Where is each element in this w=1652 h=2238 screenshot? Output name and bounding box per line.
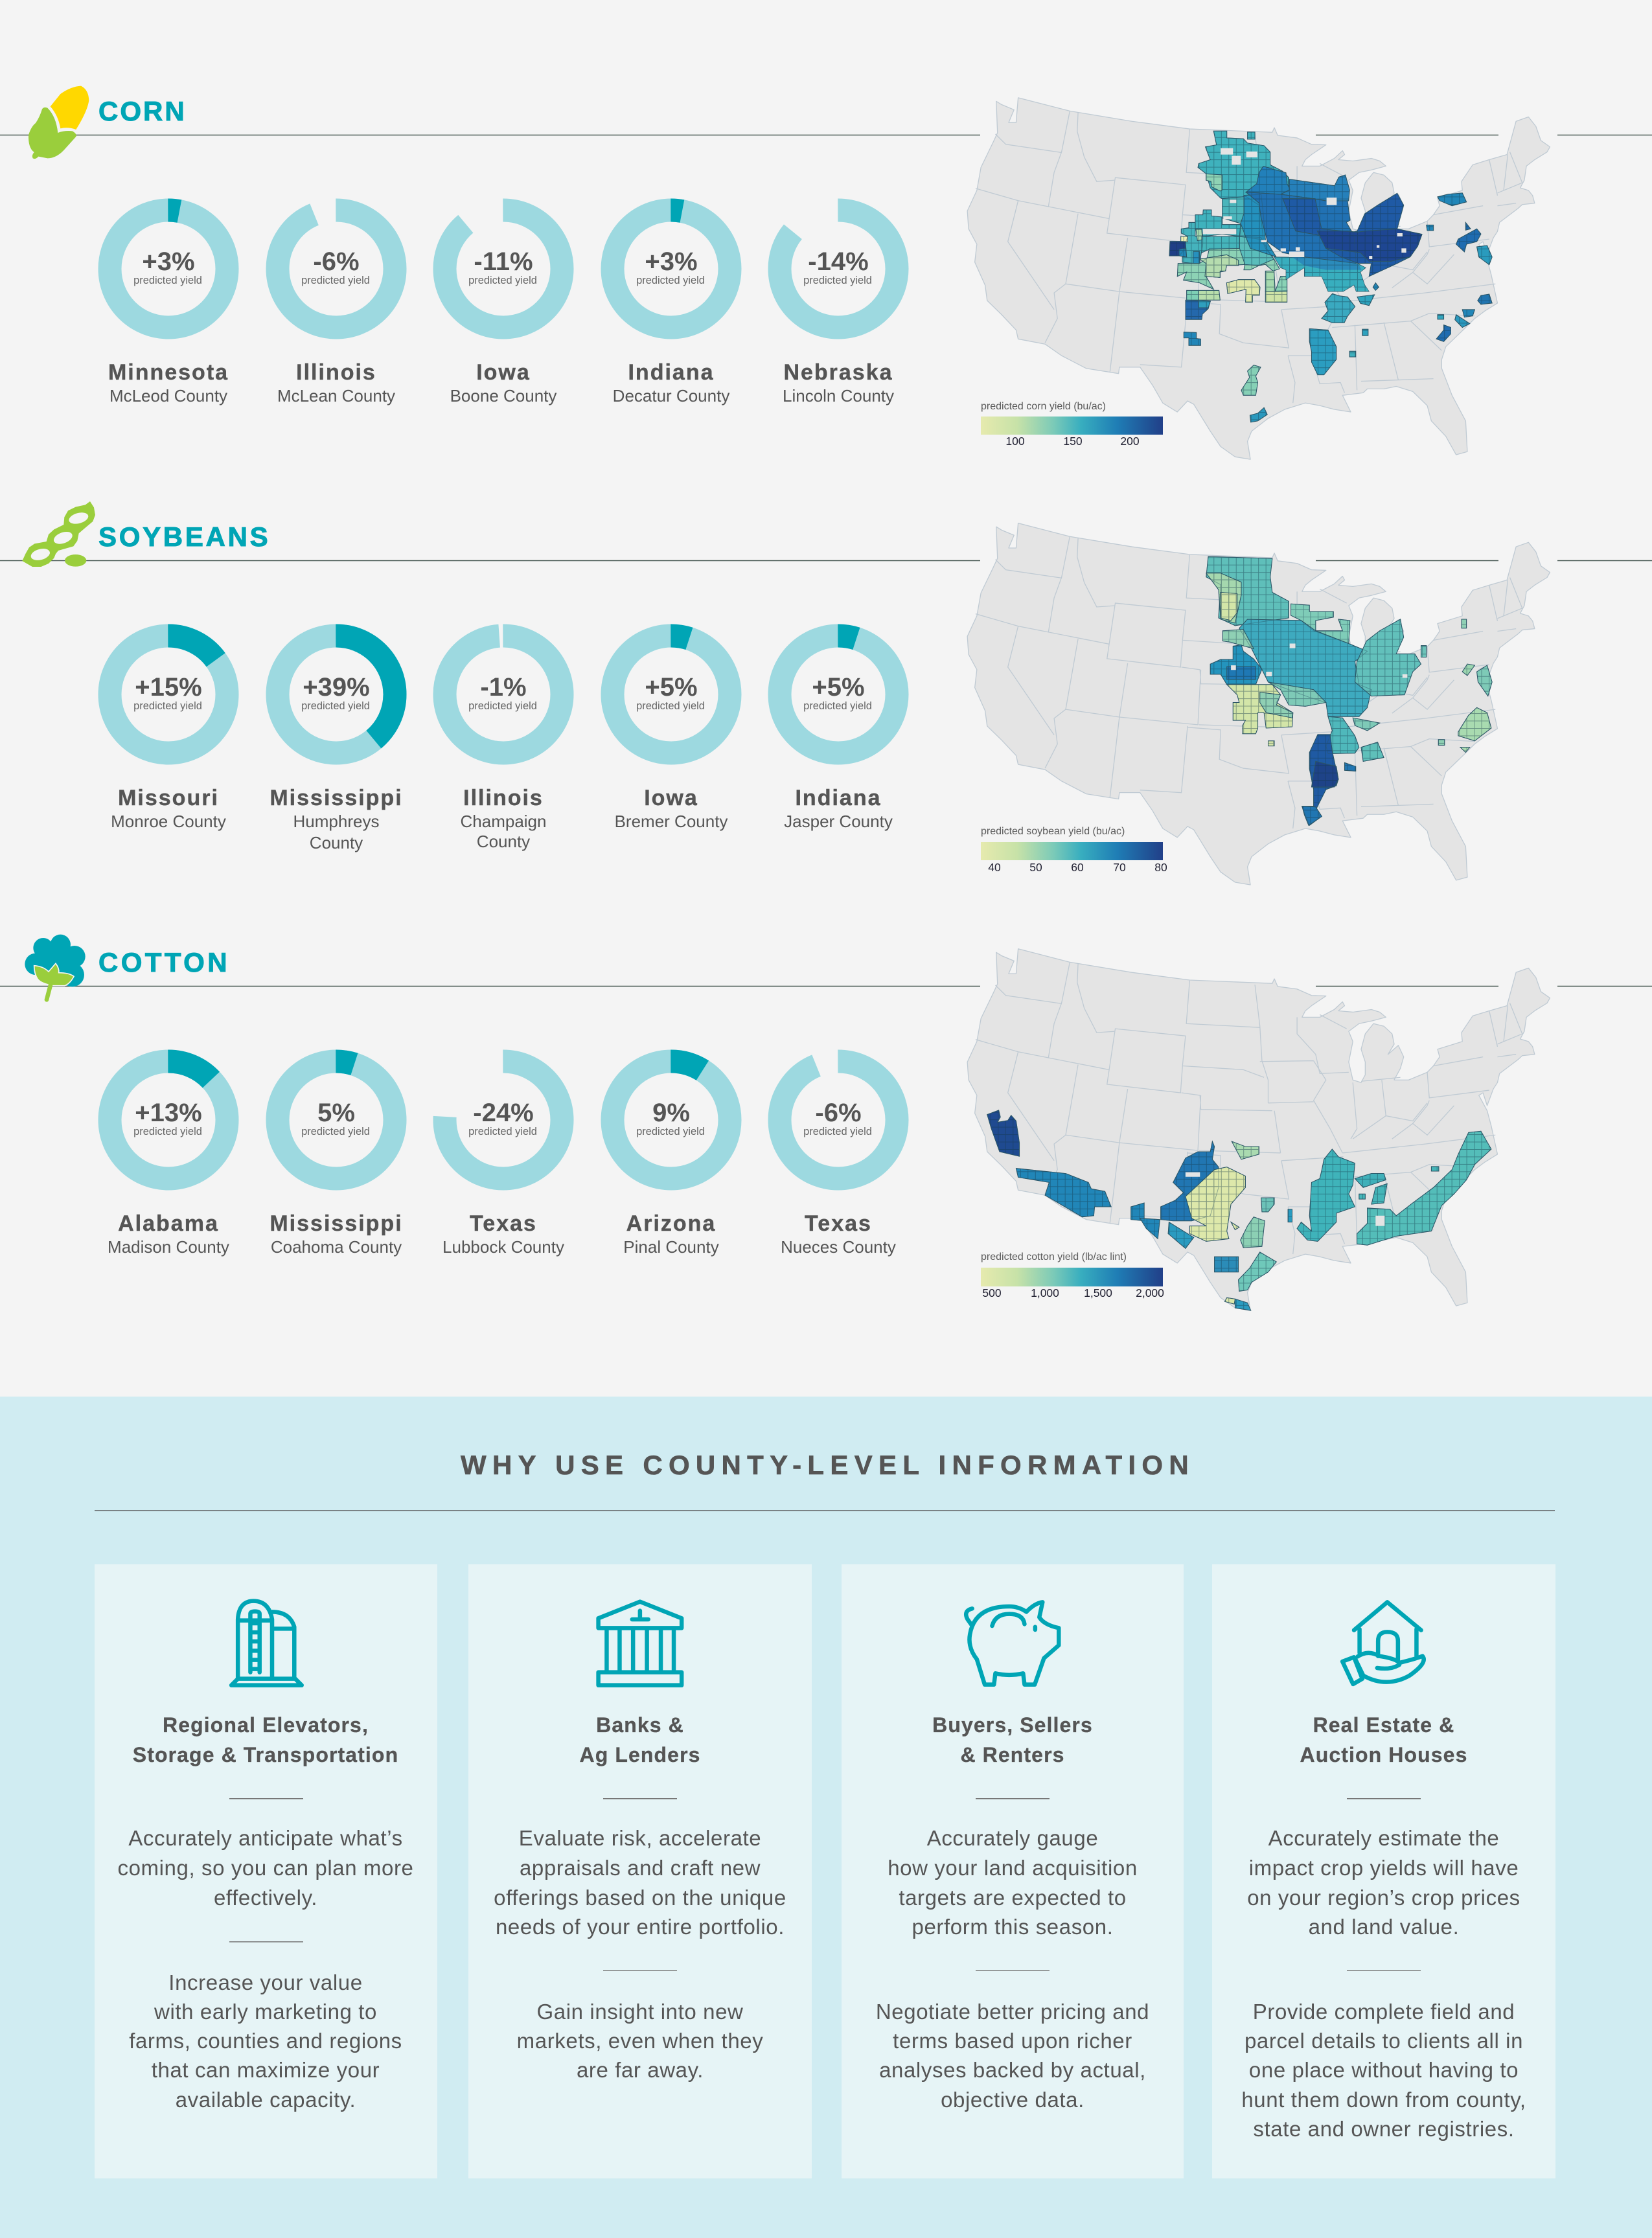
card: buyers, sellers and renters: targets are expected to — [899, 1886, 1127, 1910]
donut: Indiana +5%: predicted yield — [803, 700, 872, 712]
county fills: corn belt — [1169, 166, 1422, 345]
donut: Iowa +5%: predicted yield — [636, 700, 705, 712]
county boundary grid: corn, outlying areas — [1198, 131, 1492, 422]
donut: Mississippi 5%: Mississippi — [270, 1211, 403, 1236]
donut: Mississippi 5%: predicted yield — [301, 1126, 370, 1137]
card: real estate and auction houses — [1212, 1564, 1555, 2178]
upper row of the southern band — [1291, 257, 1362, 270]
card: regional elevators: with early marketing to — [154, 2000, 377, 2024]
donut: Alabama +13% — [108, 1061, 229, 1257]
donut: Missouri +15%: Monroe County — [111, 812, 226, 831]
county fills: cotton — [987, 1110, 1491, 1310]
donut: Minnesota +3%: McLeod County — [109, 386, 227, 405]
heading: soybeans: SOYBEANS — [98, 521, 270, 552]
card: regional elevators — [95, 1564, 437, 2178]
donut: Illinois -6%: predicted yield — [301, 275, 370, 286]
donut: Arizona 9%: predicted yield — [636, 1126, 705, 1137]
icon: cotton — [25, 935, 86, 999]
card: real estate and auction houses: Accurately estimate the — [1268, 1826, 1499, 1850]
card: regional elevators: Accurately anticipate what’s — [128, 1826, 403, 1850]
legend: cotton yield — [981, 1251, 1164, 1299]
corn belt body — [1169, 166, 1422, 345]
card: real estate and auction houses: impact crop yields will have — [1249, 1856, 1519, 1880]
card: buyers, sellers and renters: perform this season. — [912, 1915, 1113, 1939]
donut: Texas -24% — [442, 1061, 564, 1257]
donut: Texas -24%: predicted yield — [468, 1126, 537, 1137]
card: regional elevators: available capacity. — [176, 2088, 356, 2112]
card: banks and ag lenders: are far away. — [577, 2058, 704, 2082]
rule: corn section — [0, 135, 1652, 136]
donut: Indiana +3%: predicted yield — [636, 275, 705, 286]
donut: Missouri +15%: Missouri — [118, 786, 219, 810]
legend: soybean yield: predicted soybean yield (bu/ac) — [981, 826, 1125, 837]
card: buyers, sellers and renters: terms based upon richer — [893, 2029, 1132, 2053]
donut: Mississippi +39%: +39% — [303, 673, 370, 702]
donut: Iowa +5%: +5% — [645, 673, 698, 702]
card: real estate and auction houses: Provide complete field and — [1253, 2000, 1515, 2024]
donut: Texas -24%: Lubbock County — [442, 1237, 564, 1257]
donut: Indiana +3%: Indiana — [628, 360, 715, 385]
donut: Texas -6%: Nueces County — [781, 1237, 896, 1257]
card: buyers, sellers and renters: objective data. — [941, 2088, 1084, 2112]
icon: corn — [29, 86, 89, 159]
donut: Iowa +5% — [613, 636, 729, 831]
icon: soybeans — [22, 501, 95, 567]
donut: Alabama +13%: Madison County — [108, 1237, 229, 1257]
donut: Nebraska -14%: predicted yield — [803, 275, 872, 286]
map: predicted corn yield — [967, 98, 1550, 459]
donut: Arizona 9%: 9% — [652, 1099, 690, 1127]
legend: soybean yield — [981, 826, 1167, 874]
donut: Mississippi +39%: predicted yield — [301, 700, 370, 712]
legend: corn yield: 150 — [1063, 435, 1083, 448]
card: regional elevators: Increase your value — [168, 1970, 363, 1994]
legend: corn yield: 100 — [1005, 435, 1025, 448]
card: buyers, sellers and renters: & Renters — [960, 1743, 1065, 1766]
donut: Indiana +5%: +5% — [812, 673, 865, 702]
donut: Iowa -11%: predicted yield — [468, 275, 537, 286]
donut: Indiana +5%: Jasper County — [784, 812, 893, 831]
gaps without cotton data — [1186, 1172, 1384, 1226]
map: predicted soybean yield — [967, 523, 1550, 885]
icon: bank — [599, 1602, 682, 1685]
southern Missouri and Illinois band, medium blue row — [1274, 257, 1369, 291]
icon: house in hand — [1342, 1602, 1424, 1684]
donut: Minnesota +3% — [108, 210, 229, 405]
card: banks and ag lenders: offerings based on the unique — [494, 1886, 786, 1910]
icon: grain silo — [231, 1601, 302, 1685]
donut: Arizona 9%: Pinal County — [623, 1237, 719, 1257]
card: buyers, sellers and renters: Accurately gauge — [927, 1826, 1098, 1850]
map: predicted cotton yield — [967, 949, 1550, 1310]
legend: cotton yield: 1,000 — [1031, 1286, 1059, 1299]
donut: Illinois -1%: Illinois — [463, 786, 544, 810]
icon: piggy bank — [966, 1602, 1059, 1685]
donut: Iowa -11%: Iowa — [476, 360, 531, 385]
donut: Texas -6%: -6% — [815, 1099, 862, 1127]
donut: Minnesota +3%: predicted yield — [133, 275, 202, 286]
gaps without soybean data — [1231, 644, 1407, 678]
card: regional elevators: Regional Elevators, — [163, 1713, 369, 1737]
donut: Texas -6%: Texas — [805, 1211, 872, 1236]
donut: Missouri +15%: +15% — [135, 673, 202, 702]
donut: Illinois -1%: predicted yield — [468, 700, 537, 712]
donut: Alabama +13%: predicted yield — [133, 1126, 202, 1137]
heading: corn: CORN — [98, 96, 187, 126]
card: real estate and auction houses: and land value. — [1309, 1915, 1459, 1939]
donut: Mississippi +39% — [270, 636, 403, 852]
donut: Texas -6%: predicted yield — [803, 1126, 872, 1137]
donut: Alabama +13%: Alabama — [118, 1211, 219, 1236]
donut: Iowa +5%: Iowa — [644, 786, 698, 810]
card: buyers, sellers and renters: Negotiate better pricing and — [876, 2000, 1149, 2024]
card: banks and ag lenders: markets, even when they — [517, 2029, 763, 2053]
donut: Minnesota +3%: Minnesota — [108, 360, 229, 385]
legend: cotton yield: predicted cotton yield (lb/ac lint) — [981, 1251, 1127, 1262]
donut: Alabama +13%: +13% — [135, 1099, 202, 1127]
card: buyers, sellers and renters: Buyers, Sellers — [932, 1713, 1093, 1737]
legend: soybean yield: 50 — [1029, 861, 1042, 874]
donut: Nebraska -14%: Lincoln County — [783, 386, 894, 405]
donut: Iowa -11% — [444, 210, 562, 405]
donut: Nebraska -14%: -14% — [808, 247, 869, 276]
card: banks and ag lenders: Ag Lenders — [579, 1743, 701, 1766]
legend: corn yield — [981, 401, 1163, 448]
legend: soybean yield: 60 — [1071, 861, 1084, 874]
donut: Illinois -6%: Illinois — [296, 360, 376, 385]
county boundary grid: soybean — [1206, 556, 1492, 825]
county boundary grid: cotton — [987, 1110, 1491, 1310]
donut: Mississippi 5% — [270, 1061, 403, 1257]
gaps in northern plains — [1221, 148, 1257, 165]
heading: cotton: COTTON — [98, 947, 230, 977]
donut: Texas -6% — [780, 1061, 897, 1257]
donut: Mississippi 5%: 5% — [317, 1099, 355, 1127]
donut: Iowa -11%: -11% — [474, 247, 533, 276]
donut: Minnesota +3%: +3% — [142, 247, 195, 276]
donut: Arizona 9%: Arizona — [626, 1211, 716, 1236]
donut: Illinois -1%: -1% — [480, 673, 527, 702]
donut: Mississippi 5%: Coahoma County — [271, 1237, 402, 1257]
county fills: corn, outlying areas — [1198, 131, 1492, 422]
card: real estate and auction houses: parcel details to clients all in — [1245, 2029, 1523, 2053]
legend: corn yield: predicted corn yield (bu/ac) — [981, 401, 1106, 412]
donut: Indiana +3%: +3% — [645, 247, 698, 276]
donut: Illinois -6%: -6% — [313, 247, 360, 276]
legend: corn yield: 200 — [1120, 435, 1140, 448]
card: buyers, sellers and renters — [842, 1564, 1184, 2178]
donut: Illinois -1% — [444, 636, 562, 851]
donut: Mississippi +39%: Humphreys — [293, 812, 379, 831]
card: regional elevators: farms, counties and regions — [129, 2029, 402, 2053]
county boundary grid: southern band — [1274, 257, 1369, 291]
donut: Illinois -6% — [277, 210, 395, 405]
donut: Iowa +5%: Bremer County — [615, 812, 728, 831]
donut: Indiana +3%: Decatur County — [613, 386, 729, 405]
rule: cotton section — [0, 986, 1652, 987]
legend: cotton yield: 1,500 — [1084, 1286, 1112, 1299]
card: real estate and auction houses: on your region’s crop prices — [1247, 1886, 1520, 1910]
card: real estate and auction houses: Auction Houses — [1300, 1743, 1467, 1766]
donut: Iowa -11%: Boone County — [450, 386, 556, 405]
gaps in the corn belt — [1203, 198, 1406, 259]
donut: Missouri +15% — [110, 636, 227, 831]
card: regional elevators: coming, so you can plan more — [117, 1856, 414, 1880]
card: banks and ag lenders — [468, 1564, 812, 2178]
donut: Indiana +5% — [780, 636, 897, 831]
card: banks and ag lenders: appraisals and craft new — [520, 1856, 761, 1880]
card: buyers, sellers and renters: analyses backed by actual, — [879, 2058, 1146, 2082]
donut: Texas -24%: Texas — [470, 1211, 537, 1236]
donut: Texas -24%: -24% — [473, 1099, 534, 1127]
donut: Indiana +3% — [613, 210, 729, 405]
donut: Mississippi +39%: County — [310, 833, 363, 852]
card: banks and ag lenders: Evaluate risk, accelerate — [519, 1826, 761, 1850]
card: regional elevators: effectively. — [214, 1886, 317, 1910]
donut: Nebraska -14%: Nebraska — [783, 360, 893, 385]
donut: Mississippi +39%: Mississippi — [270, 786, 403, 810]
card: real estate and auction houses: hunt them down from county, — [1241, 2088, 1526, 2112]
county boundary grid: corn belt — [1169, 166, 1422, 345]
legend: cotton yield: 500 — [982, 1286, 1002, 1299]
donut: Indiana +5%: Indiana — [795, 786, 882, 810]
card: banks and ag lenders: needs of your entire portfolio. — [496, 1915, 785, 1939]
card: regional elevators: that can maximize your — [152, 2058, 380, 2082]
legend: soybean yield: 40 — [988, 861, 1001, 874]
heading: why use county-level information: WHY USE COUNTY-LEVEL INFORMATION — [461, 1450, 1195, 1480]
donut: Illinois -1%: Champaign — [461, 812, 546, 831]
donut: Illinois -1%: County — [477, 832, 530, 851]
county fills: soybean — [1206, 556, 1492, 825]
donut: Missouri +15%: predicted yield — [133, 700, 202, 712]
donut: Nebraska -14% — [780, 210, 897, 405]
legend: soybean yield: 70 — [1113, 861, 1126, 874]
card: buyers, sellers and renters: how your land acquisition — [888, 1856, 1138, 1880]
legend: soybean yield: 80 — [1154, 861, 1167, 874]
donut: Arizona 9% — [613, 1061, 729, 1257]
card: regional elevators: Storage & Transportation — [133, 1743, 398, 1766]
card: real estate and auction houses: Real Estate & — [1313, 1713, 1454, 1737]
card: banks and ag lenders: Banks & — [596, 1713, 684, 1737]
card: real estate and auction houses: one place without having to — [1249, 2058, 1519, 2082]
donut: Illinois -6%: McLean County — [277, 386, 395, 405]
rule: soybeans section — [0, 560, 1652, 561]
card: banks and ag lenders: Gain insight into new — [537, 2000, 743, 2024]
card: real estate and auction houses: state and owner registries. — [1253, 2117, 1515, 2141]
legend: cotton yield: 2,000 — [1136, 1286, 1164, 1299]
